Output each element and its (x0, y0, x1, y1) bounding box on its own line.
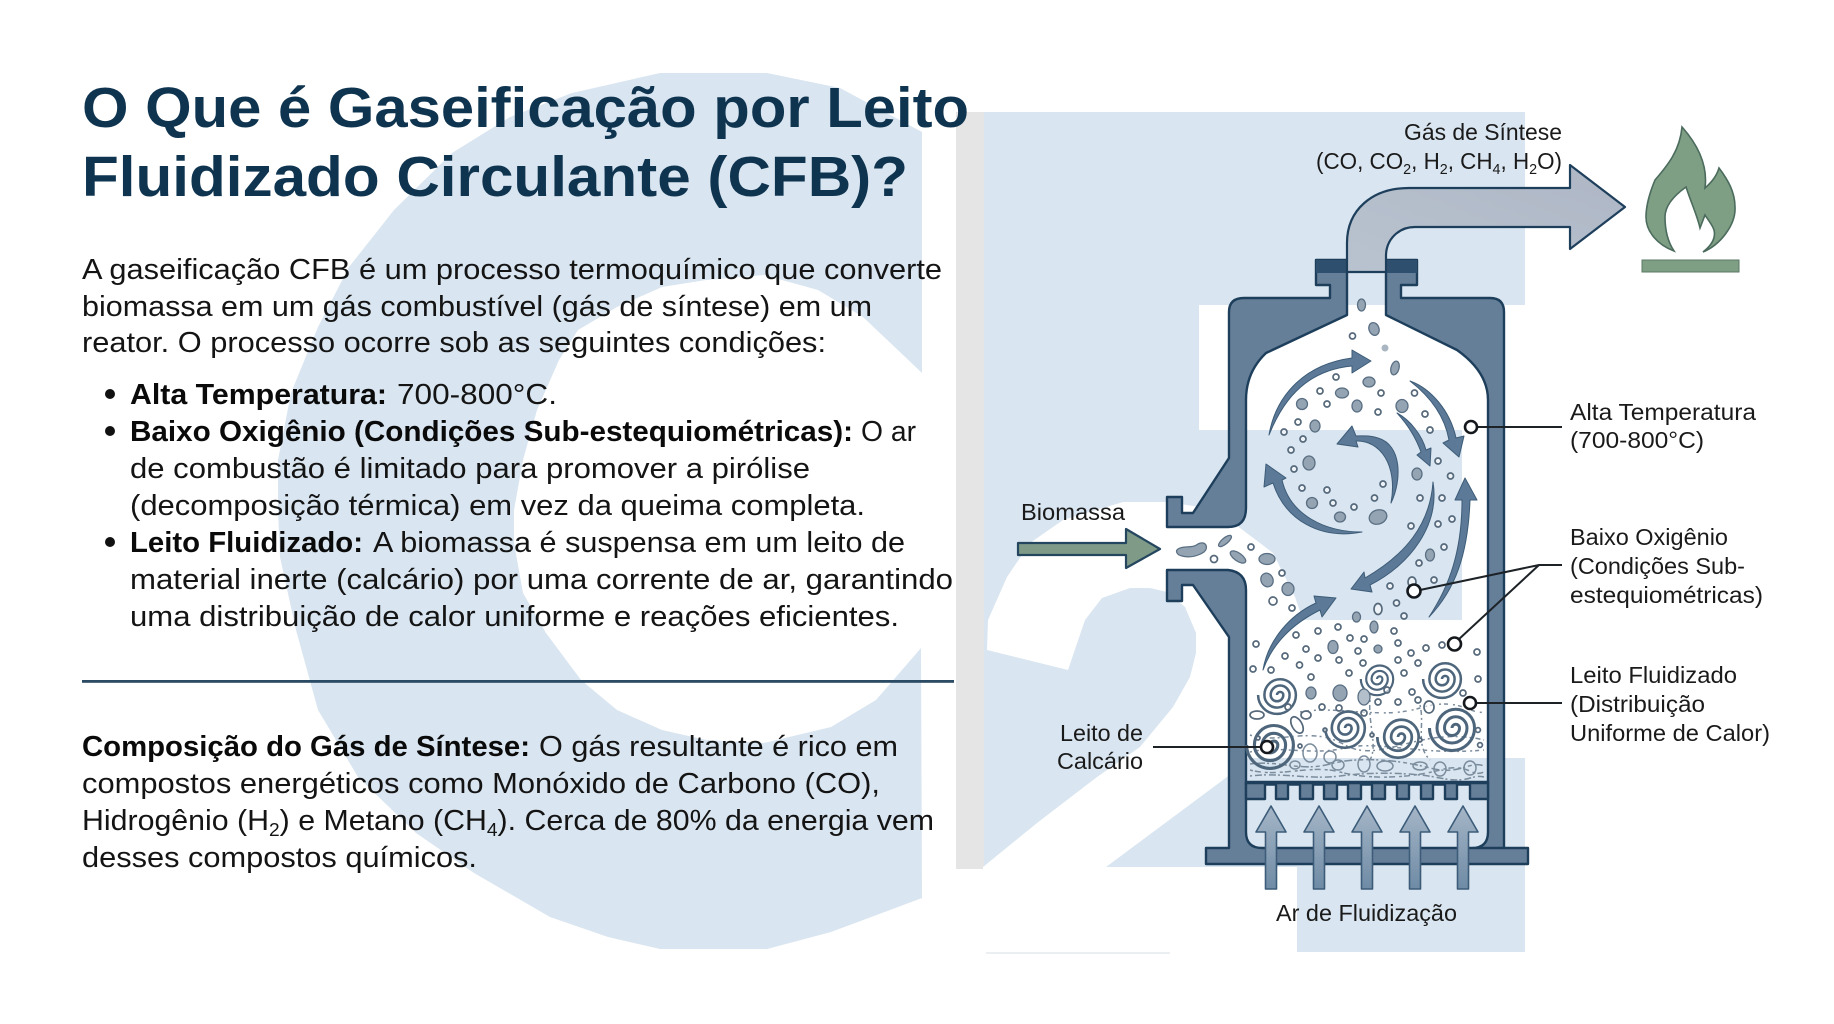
background letter C (278, 73, 922, 949)
syngas composition text: ). Cerca de 80% da energia vem (498, 805, 934, 837)
syngas composition text: 2 (269, 820, 280, 840)
bullet list (105, 379, 953, 633)
syngas composition text (82, 731, 934, 874)
biomass feed particles (1177, 534, 1295, 611)
callout: low oxygen: Baixo Oxigênio (1570, 524, 1728, 550)
intro paragraph: A gaseificação CFB é um processo termoquímico que converte (82, 254, 942, 286)
title: O Que é Gaseificação por Leito (82, 76, 969, 140)
bullet list: material inerte (calcário) por uma corrente de ar, garantindo (130, 564, 953, 596)
syngas composition text: Hidrogênio (H (82, 805, 258, 837)
callout: low oxygen: (Condições Sub- (1570, 553, 1745, 579)
label: syngas: 2 (1529, 161, 1537, 178)
freeboard particles (1281, 299, 1455, 566)
label: syngas: , CH (1448, 148, 1493, 174)
syngas composition text: Composição do Gás de Síntese: (82, 731, 530, 763)
label: syngas: O) (1537, 148, 1562, 174)
syngas composition text: ) e Metano (CH (280, 805, 487, 837)
title (82, 76, 969, 209)
grey vertical band (956, 112, 984, 869)
bullet list: Alta Temperatura: (130, 379, 387, 411)
label: syngas: (CO, CO (1316, 148, 1407, 174)
intro paragraph: biomassa em um gás combustível (gás de síntese) em um (82, 291, 872, 323)
label: syngas: , H (1500, 148, 1529, 174)
divider (82, 680, 954, 683)
callout: low oxygen: estequiométricas) (1570, 582, 1763, 608)
bullet list: Leito Fluidizado: (130, 527, 363, 559)
biomass inlet arrow (1018, 529, 1160, 568)
circulation arrows (1263, 350, 1477, 670)
callout: limestone bed (1057, 720, 1273, 774)
syngas composition text: desses compostos químicos. (82, 842, 477, 874)
bullet list: uma distribuição de calor uniforme e reações eficientes. (130, 601, 899, 633)
syngas composition text: O gás resultante é rico em (539, 731, 898, 763)
label: fluidization air: Ar de Fluidização (1276, 900, 1457, 926)
bullet list: Baixo Oxigênio (Condições Sub-estequiométricas): (130, 416, 853, 448)
background letter shape right (983, 112, 1526, 954)
bullet list: 700-800°C. (397, 379, 557, 411)
label: syngas: Gás de Síntese (1404, 119, 1562, 145)
label: syngas (1316, 119, 1562, 178)
fluidized bed (1247, 577, 1484, 780)
bullet list: A biomassa é suspensa em um leito de (373, 527, 905, 559)
syngas outlet arrow (1347, 165, 1625, 272)
bullet list: de combustão é limitado para promover a pirólise (130, 453, 810, 485)
icon: flame (1642, 127, 1739, 272)
callout: fluidized bed: Uniforme de Calor) (1570, 720, 1770, 746)
callout: limestone bed: Calcário (1057, 748, 1143, 774)
bullet list: (decomposição térmica) em vez da queima completa. (130, 490, 865, 522)
callout: high temperature (1465, 399, 1757, 453)
syngas composition text: compostos energéticos como Monóxido de Carbono (CO), (82, 768, 880, 800)
callout: fluidized bed: (Distribuição (1570, 691, 1705, 717)
label: syngas: 2 (1403, 161, 1411, 178)
syngas composition text: 4 (487, 820, 498, 840)
callout: limestone bed: Leito de (1060, 720, 1143, 746)
callout: low oxygen (1408, 524, 1763, 650)
label: syngas: 2 (1440, 161, 1448, 178)
callout: high temperature: Alta Temperatura (1570, 399, 1757, 425)
callout: fluidized bed: Leito Fluidizado (1570, 662, 1737, 688)
bullet list: O ar (861, 416, 916, 448)
intro paragraph (82, 254, 942, 359)
title: Fluidizado Circulante (CFB)? (82, 145, 908, 209)
callout: fluidized bed (1464, 662, 1770, 746)
air inlet arrows (1256, 806, 1478, 889)
gas distribution grate (1246, 782, 1488, 799)
intro paragraph: reator. O processo ocorre sob as seguintes condições: (82, 327, 826, 359)
label: syngas: , H (1411, 148, 1440, 174)
callout: high temperature: (700-800°C) (1570, 427, 1704, 453)
label: syngas: 4 (1493, 161, 1500, 178)
reactor vessel (1167, 260, 1528, 864)
label: biomass: Biomassa (1021, 499, 1126, 525)
